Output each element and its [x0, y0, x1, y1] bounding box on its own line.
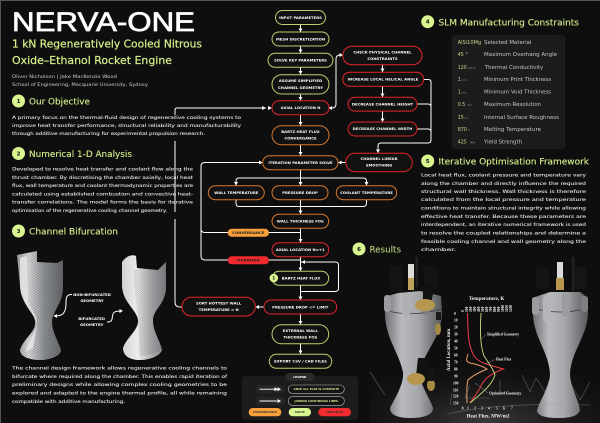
step: assume simplified channel geometry: CHANNEL GEOMETRY — [278, 85, 323, 90]
text: iterative optimisation: structural wall thickness. Wall thickness is therefore — [421, 189, 586, 195]
step: increase local helical angle: INCREASE LOCAL HELICAL ANGLE — [348, 76, 419, 82]
step: bartz heat flux convergance — [272, 126, 329, 145]
step: input parameters — [276, 10, 326, 24]
label: convergance: CONVERGANCE — [232, 230, 265, 235]
top axis ticks: 700 — [489, 306, 493, 312]
top axis ticks: 200 — [469, 306, 473, 312]
legend — [242, 373, 358, 420]
text: iterative optimisation: feasible cooling channel and wall geometry along the — [421, 239, 586, 245]
step: solve key parameters: SOLVE KEY PARAMETERS — [274, 58, 327, 62]
text: numerical analysis: flux, wall temperature and coolant thermodynamic properties are — [12, 183, 193, 189]
icon: number 5 — [421, 154, 434, 168]
curve: heat flux — [467, 354, 487, 403]
table: constraints: µm — [464, 117, 469, 120]
top axis ticks: 100 — [465, 306, 469, 312]
label: iteration: ITERATION — [237, 258, 260, 263]
step: check physical channel constraints: CONSTRAINTS — [367, 56, 398, 61]
label: iteration — [228, 256, 269, 264]
table: constraints: Maximum Resolution — [484, 102, 541, 108]
flowchart — [182, 10, 424, 368]
text: iterative optimisation: Local heat flux, coolant pressure and temperature vary — [421, 172, 586, 178]
heading: numerical analysis: Numerical 1-D Analysis — [29, 150, 132, 160]
text: objective — [12, 115, 241, 137]
table: constraints: 45 ° — [458, 52, 468, 58]
icon: number 4: 4 — [426, 20, 430, 26]
bottom axis ticks: 1 — [467, 406, 469, 410]
step: solve key parameters — [268, 53, 333, 67]
step: wall thickness fos — [272, 214, 329, 228]
text: channel bifurcation: explored and adapted to the engine thermal profile, all while remaining — [12, 390, 227, 396]
table: constraints: 1 — [458, 77, 461, 83]
step: assume simplified channel geometry: ASSUME SIMPLIFIED — [279, 78, 322, 83]
text: numerical analysis: optimisation of the regenerative cooling channel geometry. — [12, 208, 167, 214]
y axis ticks: 100 — [453, 382, 459, 386]
y axis ticks: 150 — [453, 402, 459, 406]
heading: results: Results — [370, 246, 401, 256]
image: right engine — [532, 257, 588, 418]
step: bartz heat flux: 1 — [272, 276, 275, 281]
callout: non-bifurcated geometry: NON-BIFURCATED — [73, 292, 111, 297]
step: wall thickness fos: WALL THICKNESS FOS — [277, 218, 324, 224]
table: constraints: 120 — [458, 65, 467, 71]
bottom axis ticks: 0 — [462, 406, 464, 410]
y axis ticks: 20 — [454, 326, 458, 330]
subtitle: 1 kN Regeneratively Cooled Nitrous — [12, 38, 202, 50]
text: numerical analysis: Developed to resolve heat transfer and coolant flow along the — [12, 166, 193, 172]
step: check physical channel constraints: CHECK PHYSICAL CHANNEL — [353, 49, 412, 54]
table: constraints: K — [468, 128, 470, 132]
chart axis label: heat flux: Heat Flux, MW/m2 — [466, 414, 510, 420]
step: mesh discretization — [272, 32, 329, 46]
step: decrease channel width — [348, 122, 417, 136]
bottom axis ticks: 4 — [488, 406, 490, 410]
text: numerical analysis — [12, 166, 193, 214]
step: mesh discretization: MESH DISCRETIZATION — [276, 36, 325, 41]
step: coolant temperature — [336, 186, 397, 200]
panel: results — [352, 242, 588, 420]
text: channel bifurcation — [11, 366, 228, 405]
top axis ticks: 500 — [481, 306, 485, 312]
step: wall temperature — [208, 186, 264, 200]
table: constraints: 870 — [458, 127, 467, 133]
table: constraints: mm — [467, 104, 473, 107]
y axis ticks: 10 — [454, 318, 458, 322]
y axis ticks: 120 — [453, 394, 459, 398]
watermark — [447, 375, 590, 414]
step: axial location n: AXIAL LOCATION N — [281, 105, 320, 110]
table: constraints: Yield Strength — [483, 140, 522, 146]
y axis ticks — [453, 312, 459, 406]
icon: number 2: 2 — [17, 152, 21, 158]
step: channel linear smoothing: CHANNEL LINEAR — [360, 156, 398, 161]
step: decrease channel width: DECREASE CHANNEL WIDTH — [353, 126, 412, 131]
curve: wall temperature — [468, 313, 504, 403]
top axis ticks: 900 — [497, 306, 501, 312]
table: constraints: Thermal Conductivity — [484, 65, 543, 71]
table: constraints — [452, 35, 565, 149]
heading: our objective: Our Objective — [29, 98, 90, 108]
flowchart connectors — [175, 24, 431, 354]
heading: slm constraints: SLM Manufacturing Constraints — [438, 18, 579, 28]
subtitle — [12, 38, 202, 67]
bottom axis ticks: 3 — [481, 406, 483, 410]
step: assume simplified channel geometry — [272, 75, 329, 94]
step: channel linear smoothing: SMOOTHING — [366, 163, 392, 168]
bottom axis ticks: 7 — [511, 406, 513, 410]
title: NERVA-ONE — [12, 7, 195, 37]
icon: number 6 — [352, 242, 366, 256]
panel: numerical analysis — [12, 147, 193, 214]
table: constraints: 0.5 — [458, 102, 465, 108]
bottom axis ticks: 6 — [503, 406, 505, 410]
text: iterative optimisation: conditions to maintain structural integrity while allowing — [421, 206, 586, 212]
table: constraints: Minimum Print Thickness — [484, 77, 552, 83]
step: axial location n+1 — [272, 243, 329, 257]
text: channel bifurcation: preliminary designs while allowing complex cooling geometries to be — [12, 382, 227, 388]
top axis ticks: 400 — [477, 306, 481, 312]
annotations: Simplified Geometry — [487, 332, 519, 336]
bottom axis ticks — [462, 406, 513, 410]
callout: non-bifurcated geometry: GEOMETRY — [80, 298, 104, 303]
step: bartz heat flux: BARTZ HEAT FLUX — [282, 276, 320, 281]
subtitle: Oxide–Ethanol Rocket Engine — [12, 55, 172, 67]
text: numerical analysis: transfer correlations. The model forms the basis for iterative — [12, 200, 193, 206]
label: convergance — [228, 229, 269, 237]
text: objective: improve heat transfer performance, structural reliability and manufacturability — [12, 123, 241, 129]
step: iteration parameter solve: ITERATION PARAMETER SOLVE — [268, 160, 333, 165]
y axis ticks: 110 — [453, 388, 458, 392]
annotations: Heat Flux — [496, 358, 511, 362]
step: pressure drop limit — [264, 300, 337, 314]
legend: once all else is complete: ONCE ALL ELSE IS COMPLETE — [293, 387, 339, 391]
panel: iterative optimisation — [421, 154, 590, 253]
table: constraints: Selected Material — [484, 40, 532, 46]
y axis ticks: 90 — [454, 374, 458, 378]
y axis ticks: 0 — [454, 312, 456, 316]
top axis ticks: 800 — [493, 306, 497, 312]
icon: number 4 — [421, 15, 434, 28]
image: left engine — [370, 257, 442, 418]
text: objective: A primary focus on the thermal-fluid design of regenerative cooling systems to — [12, 115, 241, 121]
top axis ticks: 1100 — [505, 305, 509, 312]
authors — [12, 74, 148, 88]
text: iterative optimisation: to resolve the coupled relationships and determine a — [421, 230, 586, 236]
panel: channel bifurcation — [11, 224, 228, 405]
step: iteration parameter solve — [263, 156, 338, 170]
y axis ticks: 60 — [454, 354, 458, 358]
panel: our objective — [12, 94, 241, 137]
annotations — [475, 332, 521, 396]
step: decrease channel height — [348, 97, 417, 111]
step: wall temperature: WALL TEMPERATURE — [214, 190, 259, 195]
step: check physical channel constraints — [343, 46, 422, 65]
table: constraints: MPa — [470, 140, 476, 144]
legend: joining continuing lines: JOINING CONTINUING LINES — [294, 399, 338, 403]
top axis ticks: 1200 — [509, 305, 513, 312]
text: iterative optimisation: calculated from the local pressure and temperature — [421, 197, 586, 203]
table: constraints: W/mK — [468, 66, 476, 70]
text: channel bifurcation: The channel design framework allows regenerative cooling channels to — [11, 366, 227, 372]
authors: School of Engineering, Macquarie University, Sydney — [12, 82, 148, 88]
table: constraints: Maximum Overhang Angle — [484, 52, 557, 58]
step: sort hottest wall temperature: SORT HOTTEST WALL — [196, 300, 242, 306]
step: axial location n+1: AXIAL LOCATION N=+1 — [276, 247, 325, 252]
callout: bifurcated geometry — [78, 309, 123, 327]
table: constraints: mm — [462, 92, 467, 94]
table: constraints: mm — [462, 79, 467, 82]
step: pressure drop: PRESSURE DROP — [282, 190, 318, 195]
y axis label: Axial Location, mm — [447, 328, 452, 371]
legend: convergance: CONVERGANCE — [253, 410, 277, 414]
legend: solve: SOLVE — [295, 410, 305, 414]
table: constraints: Internal Surface Roughness — [484, 115, 560, 121]
step: export csv cad files: EXPORT CSV / CAD FILES — [274, 359, 327, 364]
step: external wall thickness fos — [272, 325, 329, 344]
bottom axis ticks: 2 — [474, 406, 476, 410]
curve: simplified geometry — [470, 313, 495, 403]
step: coolant temperature: COOLANT TEMPERATURE — [340, 190, 393, 195]
heading: channel bifurcation: Channel Bifurcation — [29, 228, 118, 238]
icon: number 5: 5 — [426, 159, 430, 165]
step: sort hottest wall temperature: TEMPERATURE = N — [199, 307, 239, 312]
step: bartz heat flux convergance: BARTZ HEAT FLUX — [281, 129, 320, 134]
step: bartz heat flux — [270, 271, 329, 285]
top axis ticks — [461, 305, 513, 312]
step: export csv cad files — [269, 354, 332, 368]
text: iterative optimisation: chamber. — [421, 247, 456, 253]
legend: iteration: ITERATION — [326, 410, 344, 414]
panel: slm constraints — [421, 15, 579, 149]
top axis ticks: 1000 — [501, 305, 505, 312]
text: channel bifurcation: compatible with additive manufacturing. — [12, 399, 125, 405]
image: non-bifurcated nozzle — [17, 251, 63, 360]
icon: number 1 — [12, 94, 25, 108]
icon: number 3 — [12, 224, 25, 238]
y axis ticks: 70 — [454, 360, 458, 364]
step: increase local helical angle — [343, 72, 424, 86]
text: iterative optimisation: along the chamber and directly influence the required — [421, 181, 586, 187]
table: constraints: Melting Temperature — [484, 127, 541, 133]
step: bartz heat flux convergance: CONVERGANCE — [284, 136, 317, 140]
text: iterative optimisation: interdependent, an iterative numerical framework is used — [421, 222, 586, 228]
icon: number 2 — [12, 147, 25, 160]
y axis ticks: 50 — [454, 346, 458, 350]
bottom axis ticks: 5 — [496, 406, 498, 410]
text: numerical analysis: thrust chamber. By discretising the chamber axially, local heat — [12, 175, 193, 181]
annotations: Optimised Geometry — [489, 392, 521, 396]
step: sort hottest wall temperature — [182, 297, 255, 316]
top axis ticks: 0 — [461, 310, 465, 312]
step: axial location n — [272, 101, 329, 115]
chart title: temperature: Temperature, K — [469, 296, 504, 302]
text: iterative optimisation: effective heat transfer. Because these parameters are — [421, 214, 586, 220]
top axis ticks: 600 — [485, 306, 489, 312]
step: decrease channel height: DECREASE CHANNEL HEIGHT — [352, 101, 414, 106]
step: external wall thickness fos: EXTERNAL WALL — [283, 328, 319, 333]
table: constraints: 1 — [458, 90, 461, 96]
authors: Oliver Nicholson | Jake MacKenzie Wood — [12, 74, 117, 80]
image: bifurcated nozzle — [122, 255, 166, 360]
callout: bifurcated geometry: GEOMETRY — [80, 322, 104, 327]
legend title: LEGEND — [293, 375, 307, 379]
step: pressure drop — [272, 186, 328, 200]
step: pressure drop limit: PRESSURE DROP <= LIMIT — [272, 304, 329, 309]
y axis ticks: 30 — [454, 332, 458, 336]
icon: number 6: 6 — [357, 247, 361, 253]
top axis ticks: 300 — [473, 306, 477, 312]
step: channel linear smoothing — [346, 153, 412, 172]
table: constraints: Minimum Void Thickness — [484, 90, 552, 96]
text: channel bifurcation: bifurcate where required along the chamber. This enables rapid iteration of — [12, 374, 228, 380]
text: iterative optimisation — [421, 172, 586, 253]
table: constraints: 425 — [458, 140, 467, 146]
table: constraints: 15 — [458, 115, 464, 121]
callout: bifurcated geometry: BIFURCATED — [78, 316, 105, 321]
chart: heat flux and temperature — [447, 296, 521, 420]
text: numerical analysis: calculated using established combustion and convective heat- — [12, 191, 193, 197]
icon: number 1: 1 — [17, 99, 21, 105]
step: external wall thickness fos: THICKNESS FOS — [283, 334, 317, 340]
heading: iterative optimisation: Iterative Optimisation Framework — [438, 158, 590, 168]
callout: non-bifurcated geometry — [54, 292, 111, 318]
step: input parameters: INPUT PARAMETERS — [279, 15, 322, 20]
table: constraints: AlSi10Mg — [458, 40, 481, 46]
icon: number 3: 3 — [17, 229, 21, 235]
y axis ticks: 40 — [454, 340, 458, 344]
y axis ticks: 80 — [454, 368, 458, 372]
text: objective: through additive manufacturing for experimental propulsion research. — [12, 131, 205, 137]
